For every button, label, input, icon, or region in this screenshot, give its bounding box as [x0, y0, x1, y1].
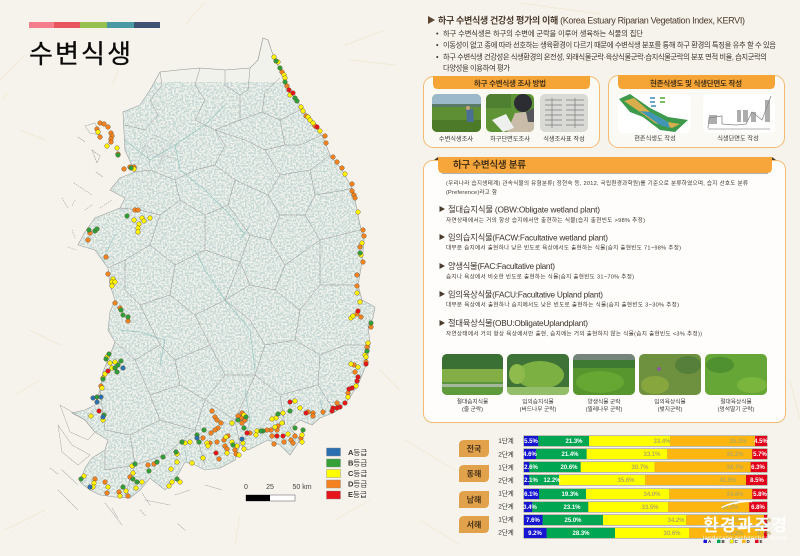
map of Korea with river network — [50, 38, 380, 530]
region tags: 남해 — [467, 494, 481, 504]
chart legend: D — [746, 539, 750, 544]
site markers: grade A — [88, 366, 244, 489]
class: FAC: 습지나 육상에서 비슷한 빈도로 출현하는 식물(습지 출현빈도 31~70% 추정) — [446, 272, 634, 280]
stacked bar chart — [523, 436, 771, 538]
bar: 전국 1단계: 21.3% — [565, 439, 583, 445]
intro text: (Preference)라고 함 — [446, 188, 497, 196]
bar: 전국 1단계: 33.4% — [653, 439, 671, 445]
map legend: A등급 — [348, 448, 367, 457]
map legend — [326, 448, 367, 499]
bar: 서해 1단계: 25.0% — [564, 518, 582, 524]
bar: 동해 2단계: 2.1% — [524, 478, 538, 484]
scale bar: 0 — [244, 484, 248, 491]
bar: 서해 2단계: 9.2% — [528, 531, 542, 537]
colour strip — [29, 22, 160, 28]
site markers: grade C — [82, 55, 370, 498]
section header: 하구 수변식생 분류 — [453, 159, 526, 171]
class: OBW: 절대습지식물 (OBW:Obligate wetland plant) — [448, 204, 600, 214]
bar: 전국 2단계 — [523, 448, 768, 460]
intro text: (우리나라 습지생태계) 관속식물의 유형분류( 정현숙 등, 2012, 국립환경과학원)를 기준으로 분류하였으며, 습지 선호도 분류 — [446, 179, 748, 187]
photo: cross-section survey — [486, 94, 534, 132]
photo: obligate wetland — [442, 354, 503, 395]
panel: riparian vegetation classification — [424, 157, 786, 422]
photo: facultative upland — [639, 354, 701, 395]
photo captions: (멍석딸기 군락) — [718, 405, 754, 413]
chart legend — [704, 539, 763, 544]
captions — [439, 135, 585, 143]
bar: 동해 1단계 — [524, 462, 768, 472]
step labels: 1단계 — [498, 462, 514, 472]
bar: 전국 1단계: 4.5% — [754, 439, 768, 445]
vegetation map image — [618, 94, 691, 133]
captions — [634, 134, 759, 142]
map legend: B등급 — [348, 458, 367, 468]
chart legend: A — [708, 539, 712, 544]
step labels: 1단계 — [498, 488, 514, 498]
bar: 전국 2단계: 35.2% — [726, 452, 744, 458]
captions: 수변식생조사 — [439, 135, 473, 143]
region tags: 서해 — [467, 520, 481, 530]
site markers: grade E — [97, 88, 368, 455]
bar: 남해 1단계: 34.8% — [726, 492, 744, 498]
cross-section chart image — [703, 94, 775, 133]
bar: 서해 1단계: 7.6% — [526, 518, 540, 524]
panel: survey methods: 하구 수변식생 조사 방법 — [474, 78, 546, 88]
step labels — [498, 436, 514, 536]
intro text — [446, 179, 748, 196]
bar: 서해 2단계: 31.2% — [726, 531, 744, 537]
bar: 남해 1단계: 19.3% — [561, 492, 579, 498]
panel: vegetation map and cross-section: 현존식생도 및 식생단면도 작성 — [650, 78, 742, 88]
class: FACW — [440, 232, 681, 252]
photo: survey sheets — [540, 94, 588, 132]
photo captions: 임의습지식물 — [522, 398, 554, 406]
bar: 동해 2단계: 41.6% — [719, 478, 737, 484]
bar: 전국 2단계: 33.1% — [643, 452, 661, 458]
bar: 남해 2단계: 3.4% — [523, 505, 537, 511]
bar: 전국 1단계: 5.5% — [524, 439, 538, 445]
captions: 식생조사표 작성 — [543, 135, 585, 143]
bar: 남해 1단계: 34.0% — [643, 492, 661, 498]
step labels: 2단계 — [498, 450, 514, 458]
bullet text block: • — [436, 52, 439, 62]
bar: 전국 1단계 — [524, 436, 768, 446]
class: FAC: 양생식물(FAC:Facultative plant) — [448, 261, 555, 271]
step labels: 1단계 — [498, 514, 514, 524]
photo captions: (벚지군락) — [658, 405, 682, 413]
captions: 현존식생도 작성 — [634, 134, 676, 142]
bar: 남해 2단계: 6.8% — [751, 505, 765, 511]
class: FACU: 대부분 육상에서 출현하나 습지에서도 낮은 빈도로 출현하는 식물(습지 출현빈도 3~30% 추정) — [446, 300, 679, 308]
step labels: 2단계 — [498, 476, 514, 484]
class: FACU — [440, 290, 679, 308]
bar: 남해 1단계: 6.1% — [524, 492, 538, 498]
bar: 동해 1단계: 39.7% — [726, 465, 744, 471]
photo captions: (찔레나무 군락) — [586, 405, 622, 413]
chart legend: C — [734, 539, 738, 544]
watermark: 환경과조경 — [703, 516, 787, 535]
step labels: 2단계 — [498, 528, 514, 536]
region tags — [459, 440, 489, 533]
map legend: D등급 — [348, 480, 367, 488]
bar: 남해 2단계 — [523, 502, 768, 512]
watermark — [703, 501, 788, 542]
map legend: C등급 — [348, 469, 367, 478]
bar: 동해 2단계: 8.5% — [750, 478, 764, 484]
photo captions: 절대습지식물 — [457, 398, 488, 406]
bar: 동해 2단계 — [524, 474, 768, 486]
photo: facultative — [573, 354, 635, 395]
bar: 동해 2단계: 35.6% — [617, 478, 635, 484]
bullet text block — [436, 29, 776, 72]
photo captions: (줄 군락) — [462, 405, 483, 413]
class: OBW — [440, 204, 645, 224]
photo: facultative wetland — [507, 354, 569, 395]
photo captions: 임의육상식물 — [654, 398, 686, 406]
region tags: 전국 — [467, 444, 482, 454]
photo captions: (버드나무 군락) — [520, 405, 556, 413]
photo captions — [457, 398, 754, 413]
class: OBW: 자연상태에서는 거의 항상 습지에서만 출현하는 식물(습지 출현빈도 >98% 추정) — [446, 216, 645, 224]
class: OBU — [440, 318, 702, 338]
bar: 서해 2단계: 0.7% — [757, 531, 771, 537]
scale bar — [244, 484, 312, 501]
chart legend: B — [722, 539, 726, 544]
class: OBU: 절대육상식물(OBU:ObligateUplandplant) — [448, 318, 588, 328]
photo: field survey — [432, 94, 481, 132]
scale bar: 50 km — [292, 484, 312, 491]
bar: 남해 2단계: 33.5% — [641, 505, 659, 511]
bar: 서해 1단계: 34.2% — [667, 518, 685, 524]
bullet text block: 다양성을 이용하여 평가 — [443, 64, 510, 72]
chart legend: E — [760, 539, 763, 544]
bullet text block: 이동성이 없고 종에 따라 선호하는 생육환경이 다르기 때문에 수변식생 분포를 통해 하구 환경의 특징을 유추 할 수 있음 — [443, 40, 776, 50]
bar: 전국 1단계: 35.3% — [729, 439, 747, 445]
bar: 동해 2단계: 12.2% — [543, 478, 561, 484]
site markers: grade B — [79, 59, 373, 489]
class: FACW: 임의습지식물(FACW:Facultative wetland plant) — [448, 232, 608, 242]
bar: 동해 1단계: 6.3% — [751, 465, 765, 471]
bullet text block: • — [436, 40, 439, 50]
islands — [50, 123, 222, 530]
bar: 서해 2단계 — [524, 528, 771, 538]
class: FACW: 대부분 습지에서 출현하나 낮은 빈도로 육상에서도 출현하는 식물(습지 출현빈도 71~98% 추정) — [446, 244, 681, 252]
bar: 서해 2단계: 30.6% — [663, 531, 681, 537]
step labels: 1단계 — [498, 436, 514, 445]
bar: 남해 2단계: 23.1% — [563, 505, 581, 511]
bar: 서해 1단계 — [524, 514, 771, 526]
bar: 동해 1단계: 30.7% — [631, 465, 649, 471]
bar: 남해 2단계: 33.2% — [721, 505, 739, 511]
bar: 서해 1단계: 31.0% — [726, 518, 744, 524]
photo: obligate upland — [705, 354, 767, 395]
panel: vegetation map and cross-section — [608, 75, 784, 148]
photo captions: 양생식물 군락 — [588, 398, 621, 406]
bullet text block: 하구 수변식생은 하구의 수변에 군락을 이루어 생육하는 식물의 집단 — [443, 29, 643, 38]
bullet text block: 하구 수변식생 건강성은 식생환경의 온전성, 외래식물군락·육상식물군락·습지식물군락의 분포 면적 비율, 습지군락의 — [443, 52, 767, 62]
site markers: grade D — [86, 70, 373, 498]
class: FAC — [440, 261, 634, 280]
captions: 하구단면도조사 — [490, 135, 530, 143]
heading: KERVI: 하구 수변식생 건강성 평가의 이해 (Korea Estuary Riparian Vegetation Index, KERVI) — [438, 14, 745, 26]
region tags: 동해 — [467, 468, 481, 478]
captions: 식생단면도 작성 — [717, 134, 759, 142]
photo captions: 절대육상식물 — [720, 398, 752, 406]
bar: 동해 1단계: 2.6% — [524, 465, 538, 471]
bar: 전국 2단계: 21.4% — [561, 452, 579, 458]
class: FACU: 임의육상식물(FACU:Facultative Upland plant) — [448, 290, 603, 300]
step labels: 2단계 — [498, 502, 514, 510]
bar: 동해 1단계: 20.6% — [560, 465, 578, 471]
bar: 서해 1단계: 2.2% — [757, 518, 771, 524]
watermark: landscape architecture korea — [703, 535, 788, 542]
bar: 서해 2단계: 28.3% — [572, 531, 590, 537]
bar: 전국 2단계: 5.7% — [753, 452, 767, 458]
bar: 남해 1단계 — [524, 488, 768, 500]
bar: 남해 1단계: 5.8% — [753, 492, 767, 498]
section header — [434, 157, 776, 174]
bullet text block: • — [436, 29, 439, 38]
title: 수변식생 — [29, 39, 131, 69]
map legend: E등급 — [348, 490, 367, 499]
scale bar: 25 — [266, 484, 274, 491]
bar: 전국 2단계: 4.6% — [523, 452, 537, 458]
panel: survey methods — [424, 76, 600, 148]
class: OBU: 자연상태에서 거의 항상 육상에서만 출현, 습지에는 거의 출현하지 않는 식물(습지 출현빈도 <3% 추정)) — [446, 330, 702, 338]
